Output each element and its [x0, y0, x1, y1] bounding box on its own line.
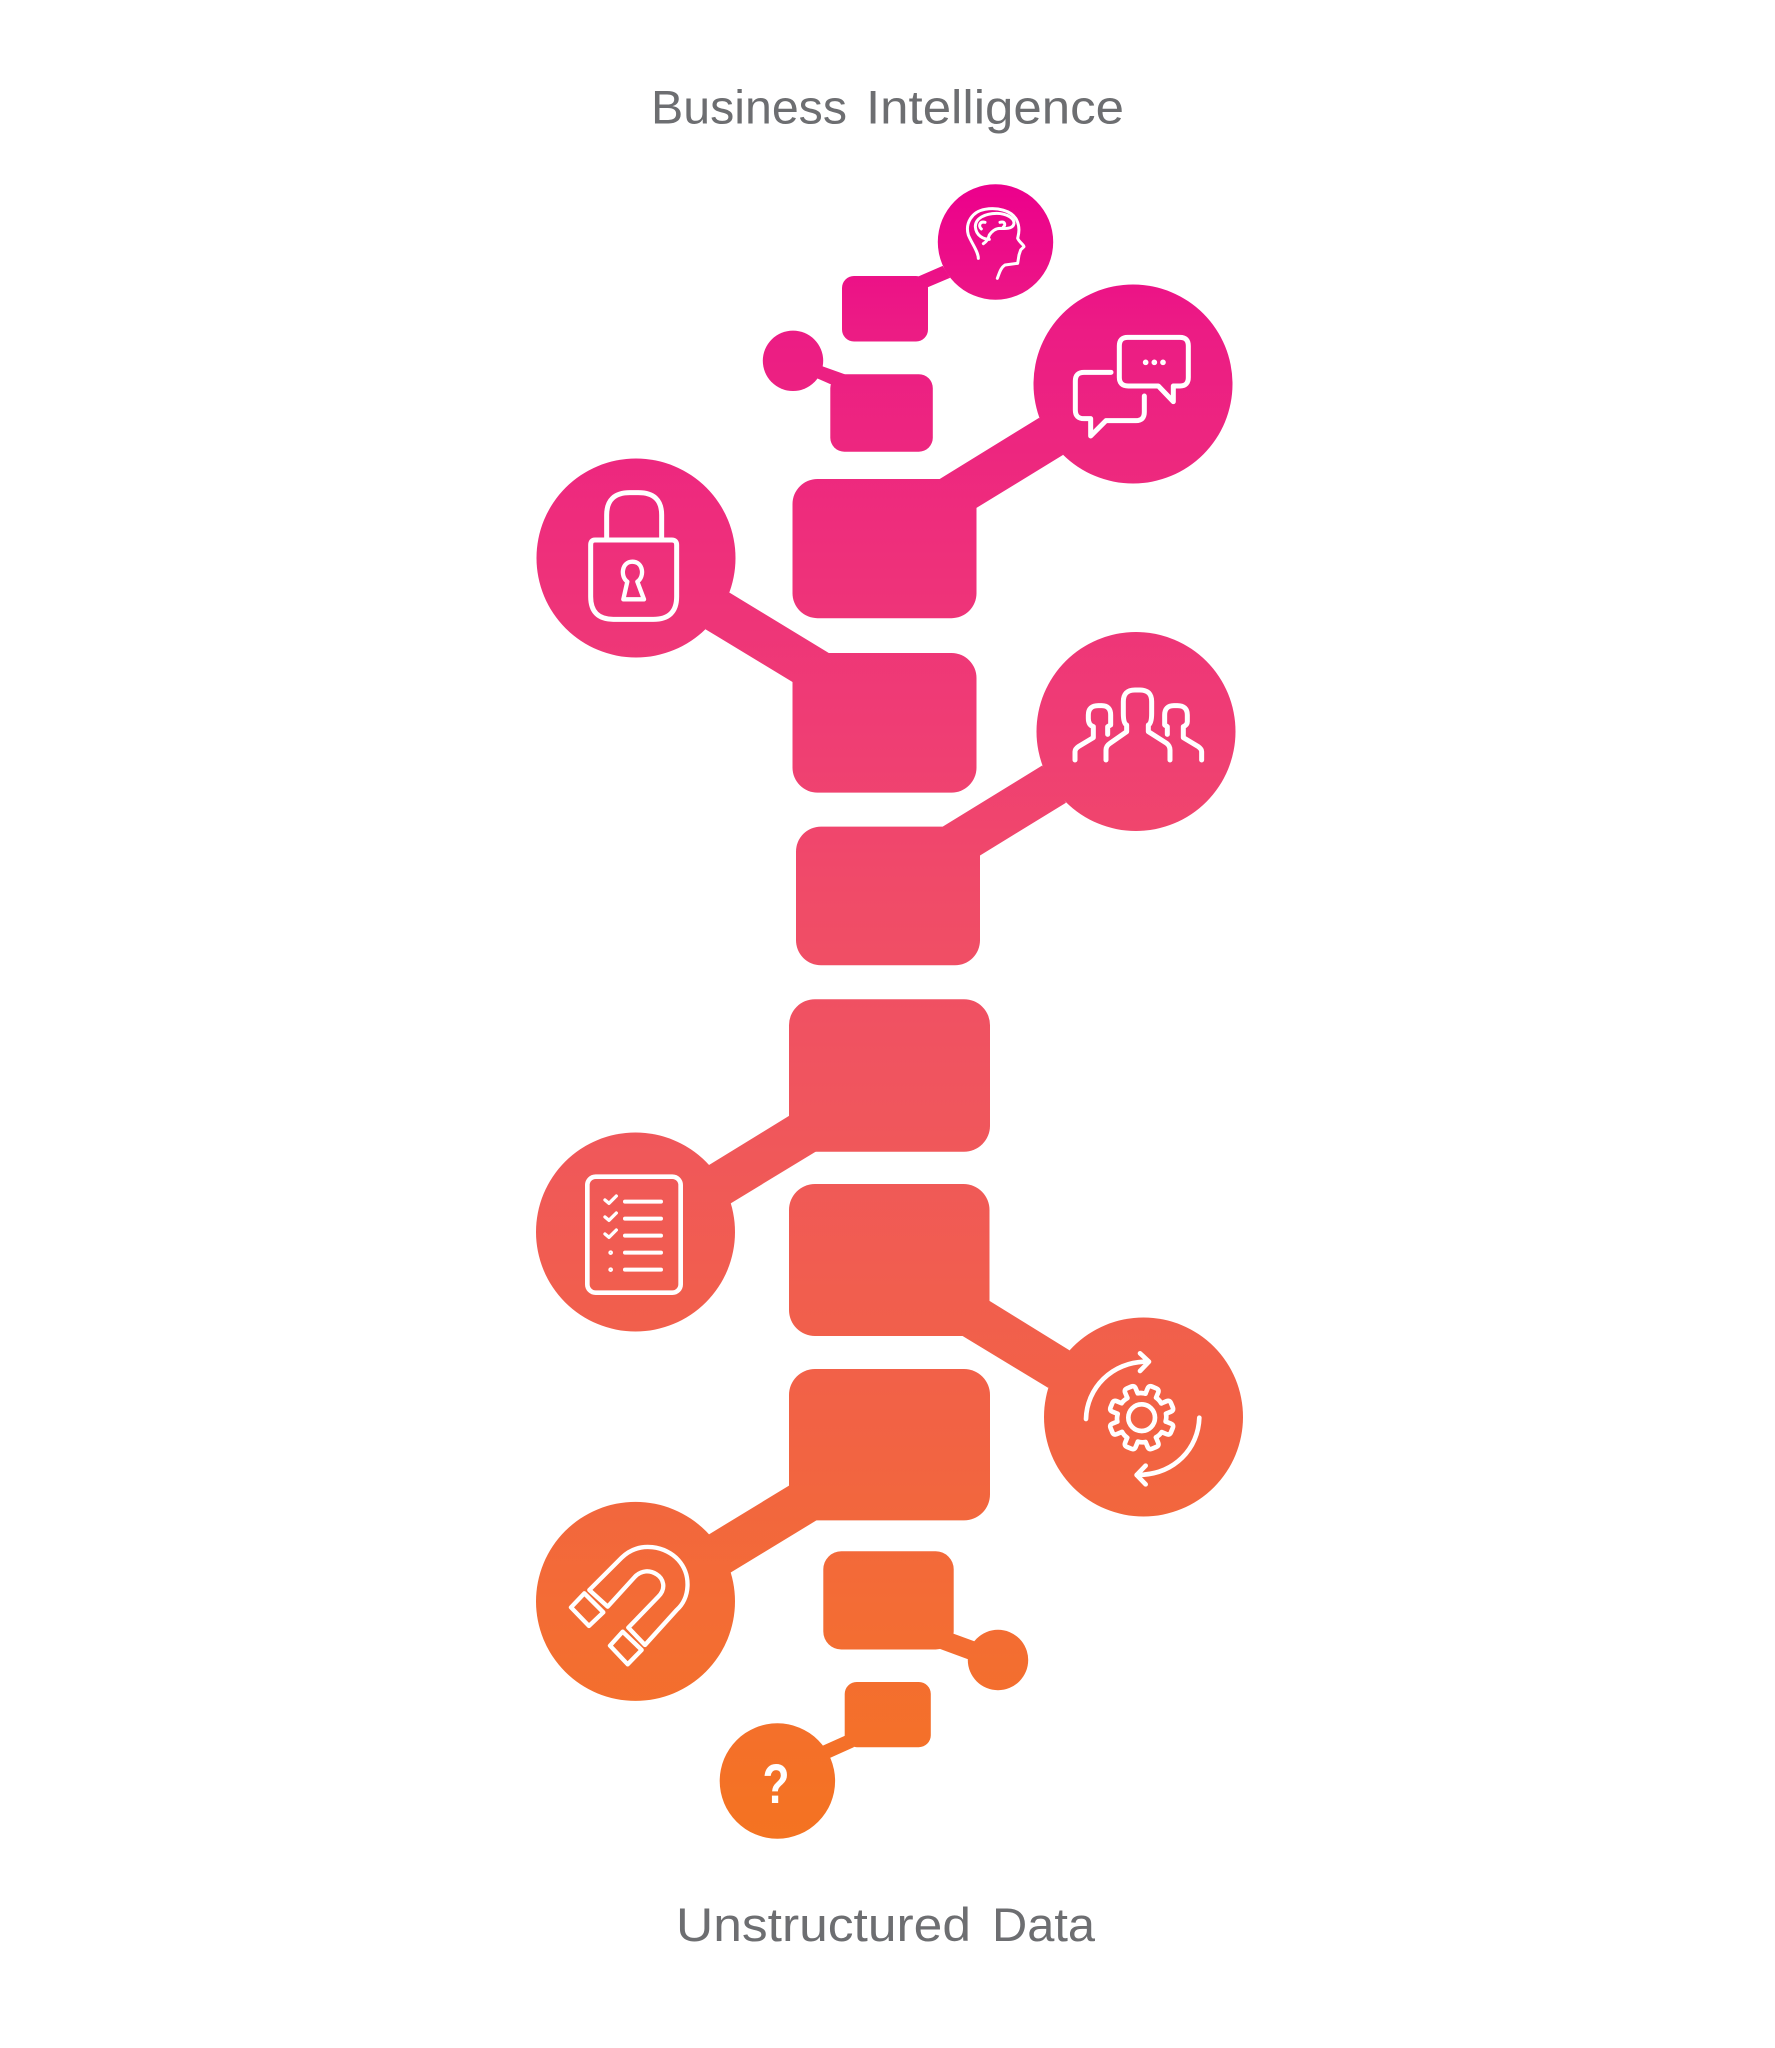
box 3 [792, 479, 976, 618]
circle 1 [938, 184, 1053, 300]
box 8 [789, 1369, 990, 1520]
connector 8 [708, 1486, 830, 1573]
step 9: small circle node [823, 1551, 1028, 1690]
footer label: Unstructured Data: Data [992, 1898, 1096, 1951]
step 3: chat node [792, 284, 1232, 618]
circle 8 [536, 1502, 735, 1701]
icon: rotating gear [1086, 1353, 1199, 1484]
step 5: team node [796, 632, 1236, 965]
step 2: small circle node [763, 331, 933, 452]
icon: chat bubbles [1075, 337, 1188, 436]
connector 3 [940, 418, 1063, 520]
title: Business Intelligence: Business [651, 80, 847, 134]
footer label: Unstructured Data [676, 1898, 1096, 1951]
circle 5 [1036, 632, 1236, 831]
circle 9 [968, 1630, 1028, 1690]
title: Business Intelligence [651, 80, 1124, 134]
circle 6 [536, 1132, 735, 1332]
connector 1 [919, 266, 950, 300]
circle 4 [536, 458, 736, 658]
step 1: brain node [842, 184, 1053, 342]
connector 2 [817, 366, 850, 390]
circle 7 [1044, 1318, 1243, 1516]
box 10 [845, 1682, 931, 1747]
circle 10 [720, 1723, 835, 1839]
connector 6 [708, 1116, 830, 1204]
step 7: gear node [789, 1184, 1243, 1516]
footer label: Unstructured Data: Unstructured [676, 1898, 971, 1951]
connector 7 [950, 1301, 1070, 1388]
step 4: lock node [536, 458, 976, 793]
icon: checklist [587, 1177, 681, 1293]
box 7 [789, 1184, 990, 1336]
title: Business Intelligence: Intelligence [866, 80, 1124, 134]
icon: three people [1075, 690, 1202, 760]
circle 3 [1034, 284, 1232, 484]
icon: head with brain [967, 209, 1024, 278]
circle 2 [763, 331, 823, 391]
step 6: checklist node [536, 999, 990, 1332]
box 4 [792, 653, 976, 793]
connector 9 [930, 1630, 975, 1659]
connector 10 [822, 1730, 860, 1758]
box 9 [823, 1551, 954, 1650]
step 8: magnet node [536, 1369, 990, 1701]
step 10: question node [720, 1682, 931, 1839]
connector 5 [943, 766, 1066, 870]
icon: padlock [591, 493, 677, 619]
box 6 [789, 999, 990, 1152]
icon: magnet [571, 1547, 688, 1664]
box 2 [830, 374, 933, 452]
connector 4 [705, 592, 829, 700]
box 5 [796, 827, 980, 965]
box 1 [842, 276, 928, 342]
icon: question mark: ? [762, 1752, 790, 1815]
